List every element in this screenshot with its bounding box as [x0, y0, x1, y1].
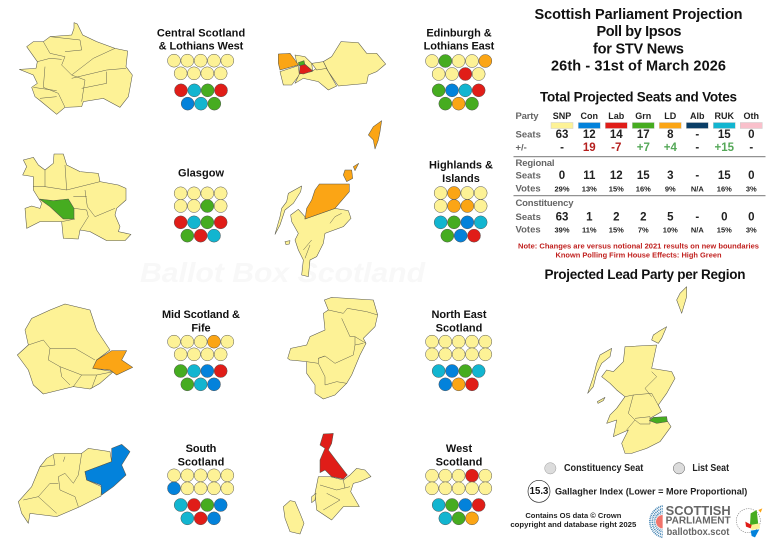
change row: +7 — [637, 142, 650, 154]
note — [518, 242, 759, 260]
heading: North East Scotland: North East — [431, 309, 487, 321]
heading: Glasgow: Glasgow — [178, 167, 224, 179]
change row: 19 — [583, 142, 596, 154]
party colour swatches — [551, 122, 762, 128]
heading: Highlands and Islands — [429, 160, 493, 185]
heading: North East Scotland: Scotland — [436, 322, 482, 334]
constituency seats row: 2 — [640, 212, 647, 224]
regional votes row: 9% — [665, 184, 676, 194]
seats: Highlands and Islands — [434, 186, 487, 242]
regional seats row: 15 — [637, 170, 650, 182]
seats: Mid Scotland and Fife — [167, 335, 234, 391]
legend: list seat — [673, 463, 730, 474]
party header row: RUK — [715, 111, 735, 121]
regional seats row: 11 — [583, 170, 596, 182]
logo: wordmark — [666, 503, 731, 538]
change row: - — [695, 142, 699, 154]
legend: constituency seat: Constituency Seat — [564, 463, 644, 474]
gallagher index: 15.3 — [530, 486, 549, 497]
heading: West Scotland: Scotland — [436, 456, 482, 468]
logo: parliament dots — [650, 506, 663, 537]
constituency seats row — [516, 212, 755, 224]
constituency votes row — [516, 224, 757, 236]
change row: -7 — [611, 142, 621, 154]
table: seats and votes — [514, 111, 766, 236]
regional votes row — [516, 184, 757, 194]
constituency section label: Constituency — [516, 198, 574, 209]
constituency votes row: 11% — [582, 226, 597, 234]
regional votes row: 3% — [746, 184, 757, 194]
seats: Central Scotland — [167, 54, 234, 110]
regional votes row: 16% — [717, 184, 732, 194]
heading: Edinburgh and Lothians East: Edinburgh & — [426, 27, 492, 39]
constituency votes row: 15% — [717, 226, 732, 234]
constituency votes row: N/A — [691, 226, 704, 234]
regional seats row: 3 — [667, 170, 674, 182]
map: lead party per region — [588, 287, 687, 453]
change row: - — [749, 142, 753, 154]
total seats row — [516, 129, 755, 141]
map: North East Scotland — [288, 297, 378, 399]
total seats row: 63 — [556, 129, 568, 141]
constituency seats row: 63 — [556, 212, 568, 224]
logo: ballot box scotland badge — [736, 508, 762, 537]
party header row: Oth — [744, 111, 759, 121]
change row: +15 — [715, 142, 735, 154]
heading: South Scotland: Scotland — [178, 456, 224, 468]
change row: - — [560, 142, 564, 154]
heading: lead party per region: Projected Lead Party per Region — [544, 267, 746, 282]
panel: middle bottom regions — [283, 297, 492, 534]
credit — [510, 511, 637, 529]
seats: North East Scotland — [425, 335, 492, 391]
map: South Scotland — [18, 444, 130, 523]
regional seats row: 0 — [748, 170, 755, 182]
regional seats row: 12 — [610, 170, 623, 182]
constituency seats row: 0 — [748, 212, 755, 224]
heading: Central Scotland: & Lothians West — [159, 40, 244, 52]
heading: Mid Scotland and Fife — [162, 309, 240, 334]
map: Edinburgh and Lothians East — [278, 42, 386, 90]
constituency votes row: 3% — [746, 226, 757, 234]
constituency seats row: 5 — [667, 212, 674, 224]
credit: copyright and database right 2025 — [510, 520, 637, 529]
constituency votes row: Votes — [516, 224, 541, 236]
constituency seats row: - — [695, 212, 699, 224]
gallagher index: Gallagher Index (Lower = More Proportional) — [555, 487, 747, 497]
seats: Edinburgh and Lothians East — [425, 54, 492, 110]
regional seats row: 15 — [718, 170, 731, 182]
title — [534, 7, 742, 74]
total seats row: 12 — [583, 129, 596, 141]
regional votes row: 13% — [582, 184, 597, 194]
panel: left top regions — [19, 23, 245, 242]
note: Known Polling Firm House Effects: High Green — [556, 250, 722, 260]
seats: South Scotland — [167, 469, 234, 525]
map: Glasgow — [23, 154, 131, 241]
party header row: Lab — [608, 111, 625, 121]
regional votes row: 15% — [609, 184, 624, 194]
heading: West Scotland — [436, 443, 482, 468]
logo: wordmark: ballotbox.scot — [667, 527, 730, 538]
map: West Scotland — [283, 433, 371, 534]
heading: Mid Scotland and Fife: Mid Scotland & — [162, 309, 240, 321]
total seats row: 14 — [610, 129, 623, 141]
constituency seats row: 2 — [613, 212, 620, 224]
regional votes row: 16% — [636, 184, 651, 194]
total seats row: 15 — [718, 129, 731, 141]
seats: Glasgow — [174, 187, 227, 242]
panel: left bottom regions — [17, 304, 240, 525]
title: for STV News — [593, 42, 684, 58]
heading: South Scotland: South — [186, 443, 217, 455]
constituency votes row: 39% — [554, 226, 570, 234]
credit: Contains OS data © Crown — [525, 511, 622, 520]
change row: +4 — [664, 142, 677, 154]
seats: West Scotland — [425, 469, 492, 525]
heading: Highlands and Islands: Highlands & — [429, 160, 493, 172]
constituency votes row: 10% — [663, 226, 678, 234]
heading: Mid Scotland and Fife: Fife — [191, 322, 211, 334]
heading: Central Scotland — [157, 27, 245, 52]
regional votes row: Votes — [516, 184, 541, 194]
note: Note: Changes are versus notional 2021 results on new boundaries — [518, 242, 759, 250]
change row — [516, 142, 753, 154]
logo: wordmark: PARLIAMENT — [666, 515, 731, 526]
total seats row: - — [695, 129, 699, 141]
regional seats row: 0 — [559, 170, 565, 182]
total seats row: Seats — [516, 130, 541, 140]
map: Mid Scotland and Fife — [17, 304, 133, 394]
party header row: LD — [664, 111, 677, 121]
total seats row: 17 — [637, 129, 650, 141]
constituency votes row: 7% — [638, 226, 649, 234]
party header row: Alb — [690, 111, 705, 121]
regional section label: Regional — [516, 158, 554, 169]
heading: South Scotland — [178, 443, 224, 468]
regional seats row: Seats — [516, 170, 541, 182]
party header row: Con — [581, 111, 598, 121]
regional seats row — [516, 170, 755, 182]
map: Central Scotland and Lothians West — [19, 23, 132, 114]
title: 26th - 31st of March 2026 — [551, 58, 726, 74]
heading: Edinburgh and Lothians East — [424, 27, 495, 52]
total seats row: 0 — [748, 129, 755, 141]
regional seats row: - — [695, 170, 699, 182]
heading: Edinburgh and Lothians East: Lothians East — [424, 40, 495, 52]
total seats row: 8 — [667, 129, 674, 141]
watermark: Ballot Box Scotland — [140, 257, 426, 288]
title: Scottish Parliament Projection — [534, 7, 742, 23]
panel: middle top regions — [275, 27, 495, 277]
legend: list seat: List Seat — [692, 463, 730, 474]
gallagher index — [528, 480, 747, 502]
change row: +/- — [516, 142, 527, 154]
party header row: Party — [516, 111, 539, 122]
regional votes row: 29% — [554, 184, 570, 194]
heading: total seats and votes: Total Projected Seats and Votes — [540, 90, 737, 104]
heading: Highlands and Islands: Islands — [442, 173, 480, 185]
map: Highlands and Islands — [275, 121, 382, 277]
constituency seats row: Seats — [516, 212, 541, 223]
regional votes row: N/A — [691, 184, 704, 194]
heading: West Scotland: West — [446, 443, 472, 455]
logo: wordmark: SCOTTISH — [666, 503, 731, 518]
constituency votes row: 15% — [609, 226, 624, 234]
party header row — [516, 111, 759, 122]
party header row: Grn — [635, 111, 651, 121]
heading: Central Scotland: Central Scotland — [157, 27, 245, 39]
constituency seats row: 1 — [586, 212, 593, 224]
party header row: SNP — [553, 111, 571, 121]
constituency seats row: 0 — [721, 212, 728, 224]
heading: North East Scotland — [431, 309, 487, 334]
title: Poll by Ipsos — [596, 24, 682, 40]
panel: national map and legend — [510, 287, 762, 538]
